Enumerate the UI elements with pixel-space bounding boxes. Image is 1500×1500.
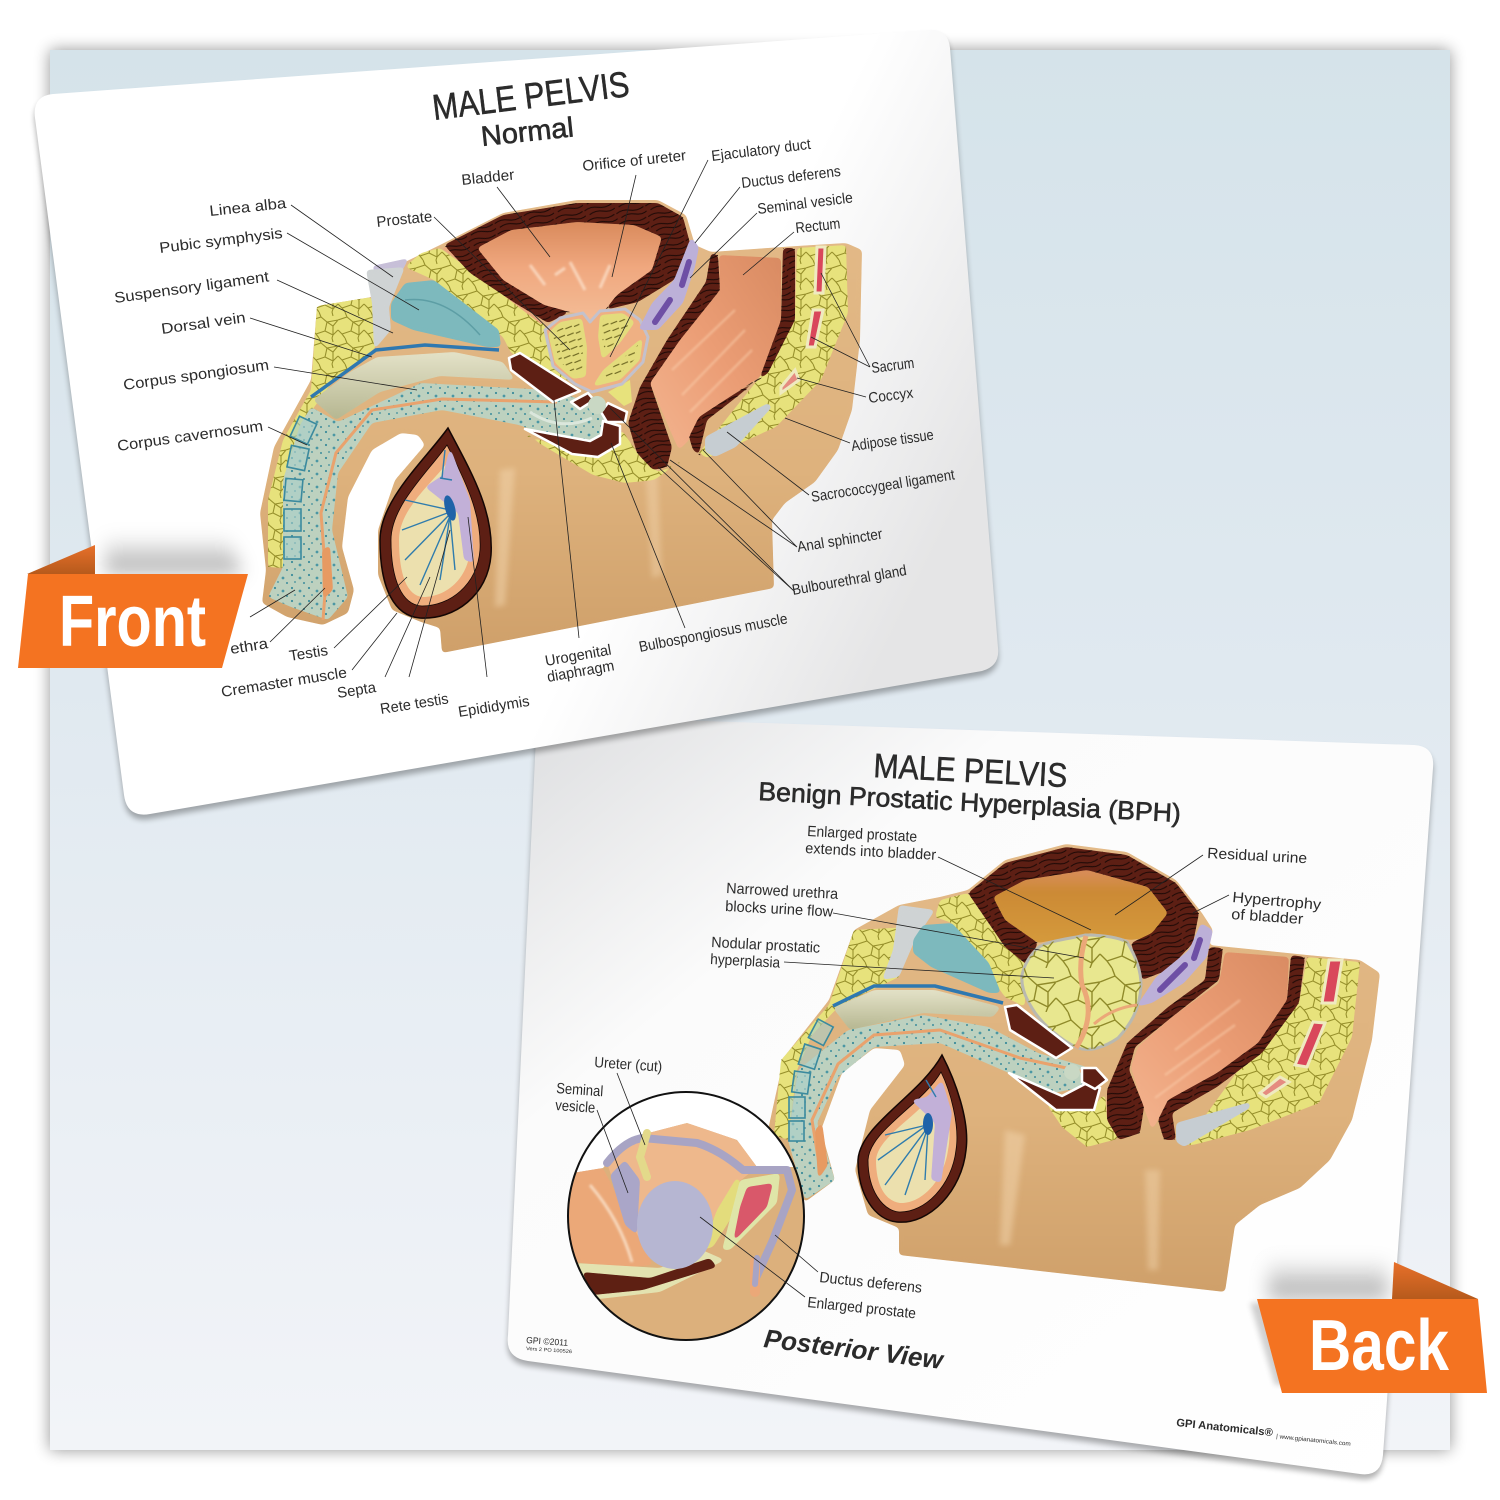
label: Cremaster muscle (220, 664, 348, 701)
label: Bulbourethral gland (791, 562, 908, 599)
adipose tissue (774, 893, 1360, 1147)
urogenital muscle (1005, 1005, 1107, 1110)
adipose tissue (268, 245, 848, 568)
tag: back (1250, 1258, 1487, 1393)
label: Sacrum (870, 355, 915, 377)
ureter (640, 1133, 647, 1177)
label: Ductus deferens (819, 1269, 923, 1297)
label: Narrowed urethra (726, 880, 839, 903)
rectal section (707, 1180, 740, 1248)
urogenital muscle (509, 353, 627, 457)
corpus spongiosum (268, 383, 612, 620)
label: Enlarged prostate (807, 823, 918, 846)
labels: inset (526, 1054, 1351, 1448)
testis (380, 428, 491, 618)
label: Orifice of ureter (582, 147, 687, 175)
sacrum and coccyx (781, 247, 825, 393)
model: normal pelvis (260, 200, 862, 653)
label: Epididymis (457, 693, 531, 721)
label: blocks urine flow (725, 898, 834, 921)
label: Ejaculatory duct (710, 136, 813, 165)
tag: front (18, 535, 248, 668)
label: Enlarged prostate (807, 1294, 917, 1322)
label: ethra (229, 635, 270, 658)
title: back card: MALE PELVIS (873, 747, 1068, 795)
label: Sacrococcygeal ligament (810, 466, 957, 506)
label: Testis (288, 642, 329, 665)
label: Residual urine (1207, 845, 1308, 867)
body (768, 844, 1380, 1292)
labels: back card (710, 823, 1322, 978)
website: | www.gpianatomicals.com (1276, 1434, 1351, 1448)
label: Dorsal vein (160, 309, 247, 338)
seminal vesicle (638, 237, 699, 330)
copyright: GPI ©2011 (526, 1335, 568, 1348)
label: Rete testis (379, 690, 450, 718)
title: front card: MALE PELVIS (430, 63, 631, 128)
base (576, 1123, 803, 1339)
labels: front card (113, 136, 957, 721)
label: Coccyx (867, 385, 915, 407)
bladder (968, 847, 1199, 980)
label: Suspensory ligament (113, 268, 271, 307)
label: Nodular prostatic (711, 934, 821, 957)
panel: front card (35, 30, 998, 820)
label: Seminal (556, 1080, 604, 1100)
prostate (545, 309, 648, 392)
corpus cavernosum tube (313, 352, 515, 420)
label: extends into bladder (805, 840, 937, 864)
suspensory ligament (882, 905, 935, 980)
corpus cavernosum (833, 990, 1001, 1030)
body (260, 200, 862, 653)
left fold (569, 1168, 651, 1266)
label: Urogenital (544, 642, 613, 670)
brand: GPI Anatomicals® (1176, 1417, 1273, 1439)
panel: back card (508, 716, 1433, 1479)
label: Prostate (376, 208, 433, 231)
bladder dome (608, 1124, 756, 1236)
title: back card (758, 747, 1182, 828)
tag: front: Front (59, 582, 206, 662)
seminal vesicle (1136, 923, 1213, 1007)
testis (858, 1055, 967, 1222)
suspensory ligament (366, 267, 405, 350)
label: Bulbospongiosus muscle (638, 610, 789, 656)
enlarged prostate (637, 1181, 713, 1269)
label: Adipose tissue (850, 427, 935, 455)
title: back card: Benign Prostatic Hyperplasia (BPH) (758, 776, 1182, 828)
label: Ductus deferens (740, 163, 842, 192)
model: BPH pelvis (768, 844, 1380, 1292)
label: Linea alba (209, 195, 288, 220)
label: Corpus spongiosum (122, 357, 270, 394)
label: Ureter (cut) (594, 1054, 663, 1076)
inset: posterior view (567, 1091, 805, 1341)
corpus spongiosum (788, 1015, 1087, 1200)
label: Bladder (461, 167, 515, 189)
title: front card: Normal (479, 111, 575, 152)
label: hyperplasia (710, 951, 781, 972)
rectum (1107, 947, 1305, 1140)
label: Rectum (795, 215, 841, 237)
label: Hypertrophy (1232, 889, 1322, 914)
part code: Vers 2 PO 100526 (526, 1346, 572, 1355)
sacrococcygeal ligament (705, 403, 772, 457)
label: diaphragm (546, 657, 616, 686)
rectum (628, 248, 795, 470)
label: Pubic symphysis (158, 225, 284, 257)
label: vesicle (555, 1097, 596, 1117)
title: front card (430, 63, 631, 152)
label: Corpus cavernosum (116, 418, 264, 455)
linea alba (372, 258, 409, 280)
sacrococcygeal ligament (1176, 1102, 1250, 1147)
heading: Posterior View (762, 1323, 946, 1375)
pubic symphysis (913, 923, 1001, 993)
bottom muscle (575, 1250, 725, 1300)
label: of bladder (1231, 906, 1304, 928)
label: Anal sphincter (796, 526, 884, 556)
seminal vesicle (610, 1160, 640, 1235)
label: Septa (336, 679, 378, 702)
bladder (444, 203, 691, 323)
ductus deferens (607, 1138, 792, 1280)
tag: back: Back (1309, 1306, 1450, 1386)
label: Seminal vesicle (756, 189, 854, 218)
enlarged prostate (1022, 935, 1141, 1049)
sacrum and coccyx (1260, 960, 1342, 1097)
pubic symphysis (391, 280, 501, 347)
